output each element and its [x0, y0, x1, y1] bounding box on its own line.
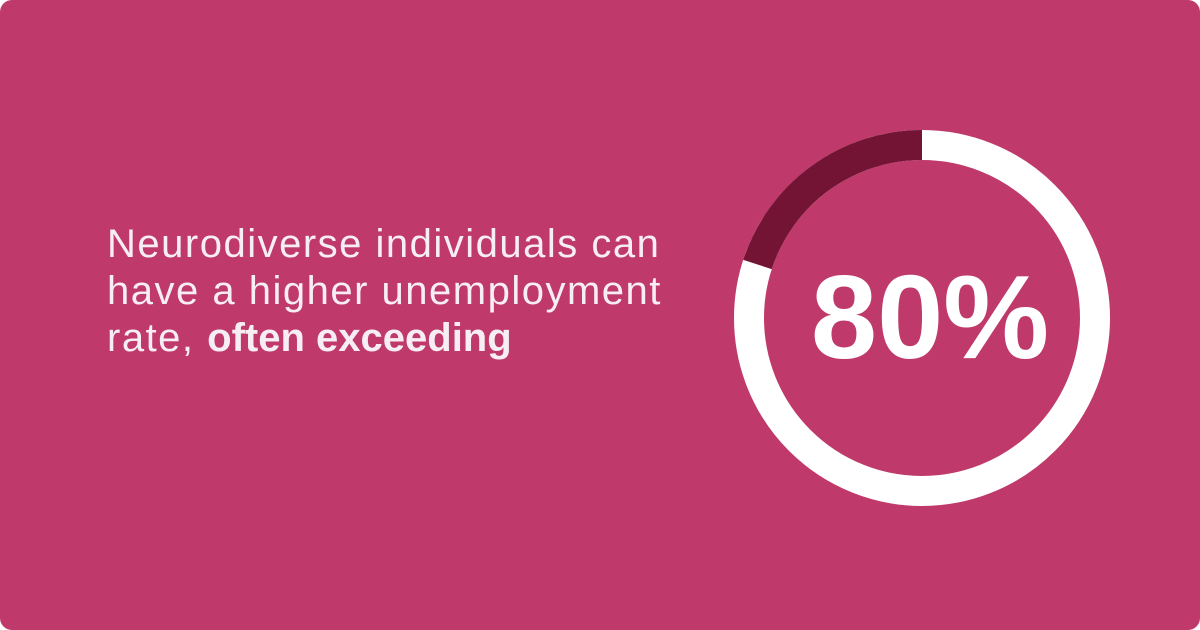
text block: statement — [107, 222, 662, 360]
stat number: 80% — [811, 251, 1049, 384]
text block: statement: have a higher unemployment — [107, 269, 662, 313]
text block: statement: rate, often exceeding — [107, 316, 512, 360]
text block: statement: Neurodiverse individuals can — [107, 222, 660, 266]
dark arc: 20% segment — [758, 145, 922, 264]
